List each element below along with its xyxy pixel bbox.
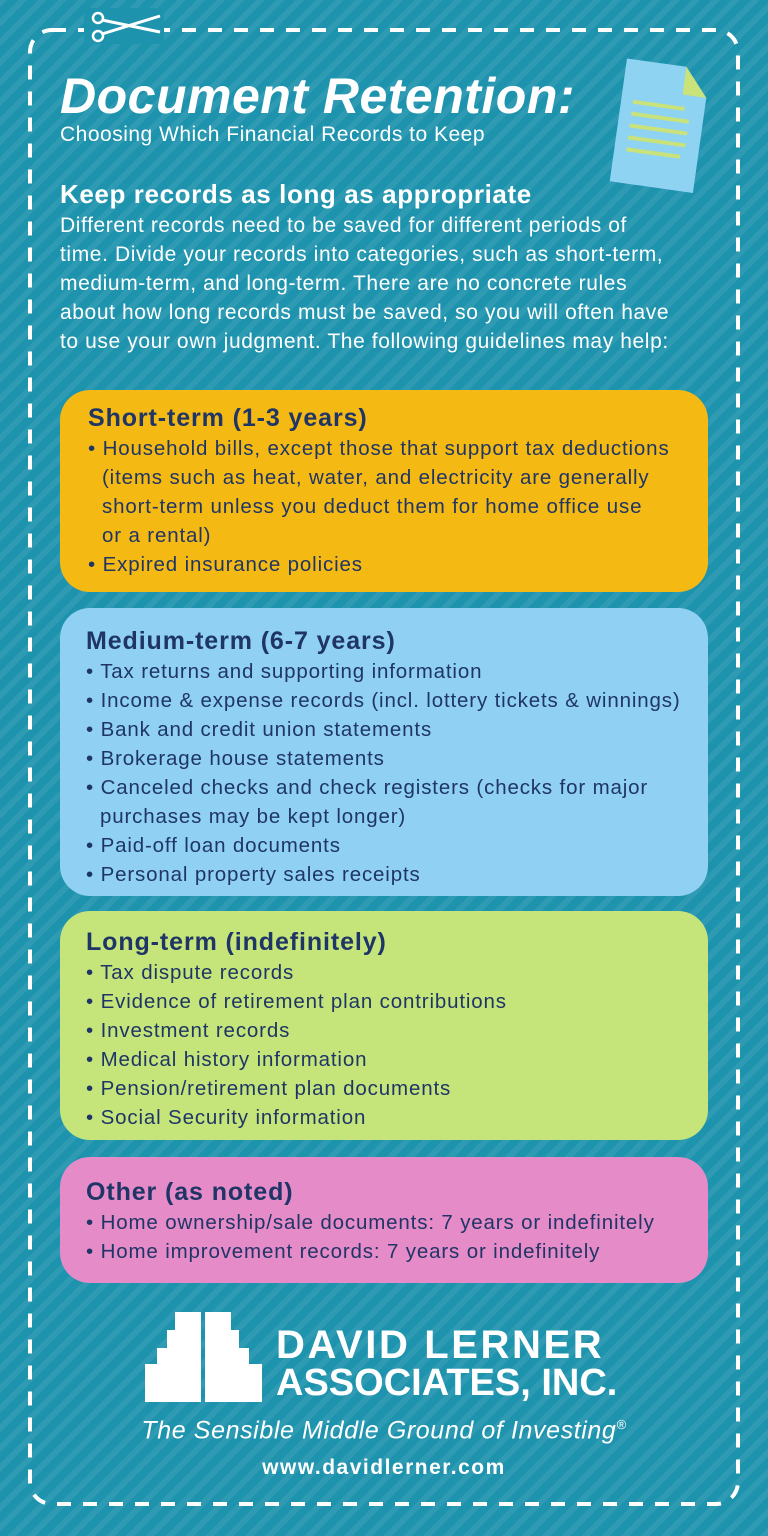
panel: short-term: • Expired insurance policies — [88, 553, 363, 576]
intro text: to use your own judgment. The following guidelines may help: — [60, 330, 669, 353]
intro text: about how long records must be saved, so you will often have — [60, 301, 669, 324]
intro text: Different records need to be saved for different periods of — [60, 214, 627, 237]
logo — [145, 1312, 617, 1404]
subtitle: Choosing Which Financial Records to Keep — [60, 123, 485, 146]
panel: long-term: • Tax dispute records — [86, 961, 294, 984]
panel: other: • Home ownership/sale documents: 7 years or indefinitely — [86, 1211, 655, 1234]
panel: short-term: or a rental) — [102, 524, 211, 547]
icon: document — [610, 58, 706, 193]
panel: other: • Home improvement records: 7 years or indefinitely — [86, 1240, 600, 1263]
panel: long-term: • Social Security information — [86, 1106, 366, 1129]
title: Document Retention: — [60, 68, 575, 124]
panel: medium-term: • Income & expense records (incl. lottery tickets & winnings) — [86, 689, 681, 712]
panel: medium-term: • Paid-off loan documents — [86, 834, 341, 857]
intro text: medium-term, and long-term. There are no concrete rules — [60, 272, 627, 295]
panel: medium-term: • Personal property sales receipts — [86, 863, 421, 886]
tagline: The Sensible Middle Ground of Investing® — [141, 1416, 627, 1444]
panel: short-term: short-term unless you deduct them for home office use — [102, 495, 642, 518]
panel: long-term: • Investment records — [86, 1019, 290, 1042]
intro heading: Keep records as long as appropriate — [60, 179, 532, 209]
panel: medium-term — [60, 608, 708, 896]
panel: long-term: • Pension/retirement plan documents — [86, 1077, 451, 1100]
panel: short-term: • Household bills, except those that support tax deductions — [88, 437, 670, 460]
panel: medium-term: purchases may be kept longer) — [100, 805, 406, 828]
panel: medium-term: Medium-term (6-7 years) — [86, 627, 396, 655]
panel: other: Other (as noted) — [86, 1178, 293, 1206]
icon: scissors — [84, 8, 164, 44]
intro text — [60, 214, 669, 353]
website: www.davidlerner.com — [262, 1456, 506, 1479]
panel: long-term — [60, 911, 708, 1140]
panel: long-term: Long-term (indefinitely) — [86, 928, 387, 956]
company name: ASSOCIATES, INC. — [276, 1362, 617, 1404]
panel: medium-term: • Tax returns and supporting information — [86, 660, 482, 683]
panel: short-term — [60, 390, 708, 592]
intro text: time. Divide your records into categories, such as short-term, — [60, 243, 663, 266]
panel: medium-term: • Bank and credit union statements — [86, 718, 432, 741]
panel: other — [60, 1157, 708, 1283]
panel: medium-term: • Brokerage house statements — [86, 747, 385, 770]
panel: medium-term: • Canceled checks and check registers (checks for major — [86, 776, 648, 799]
company name: DAVID LERNER — [276, 1323, 604, 1367]
icon: stairs logo — [145, 1312, 262, 1402]
panel: long-term: • Evidence of retirement plan contributions — [86, 990, 507, 1013]
panel: long-term: • Medical history information — [86, 1048, 367, 1071]
panel: short-term: (items such as heat, water, and electricity are generally — [102, 466, 650, 489]
panel: short-term: Short-term (1-3 years) — [88, 404, 368, 432]
company name — [276, 1323, 617, 1404]
